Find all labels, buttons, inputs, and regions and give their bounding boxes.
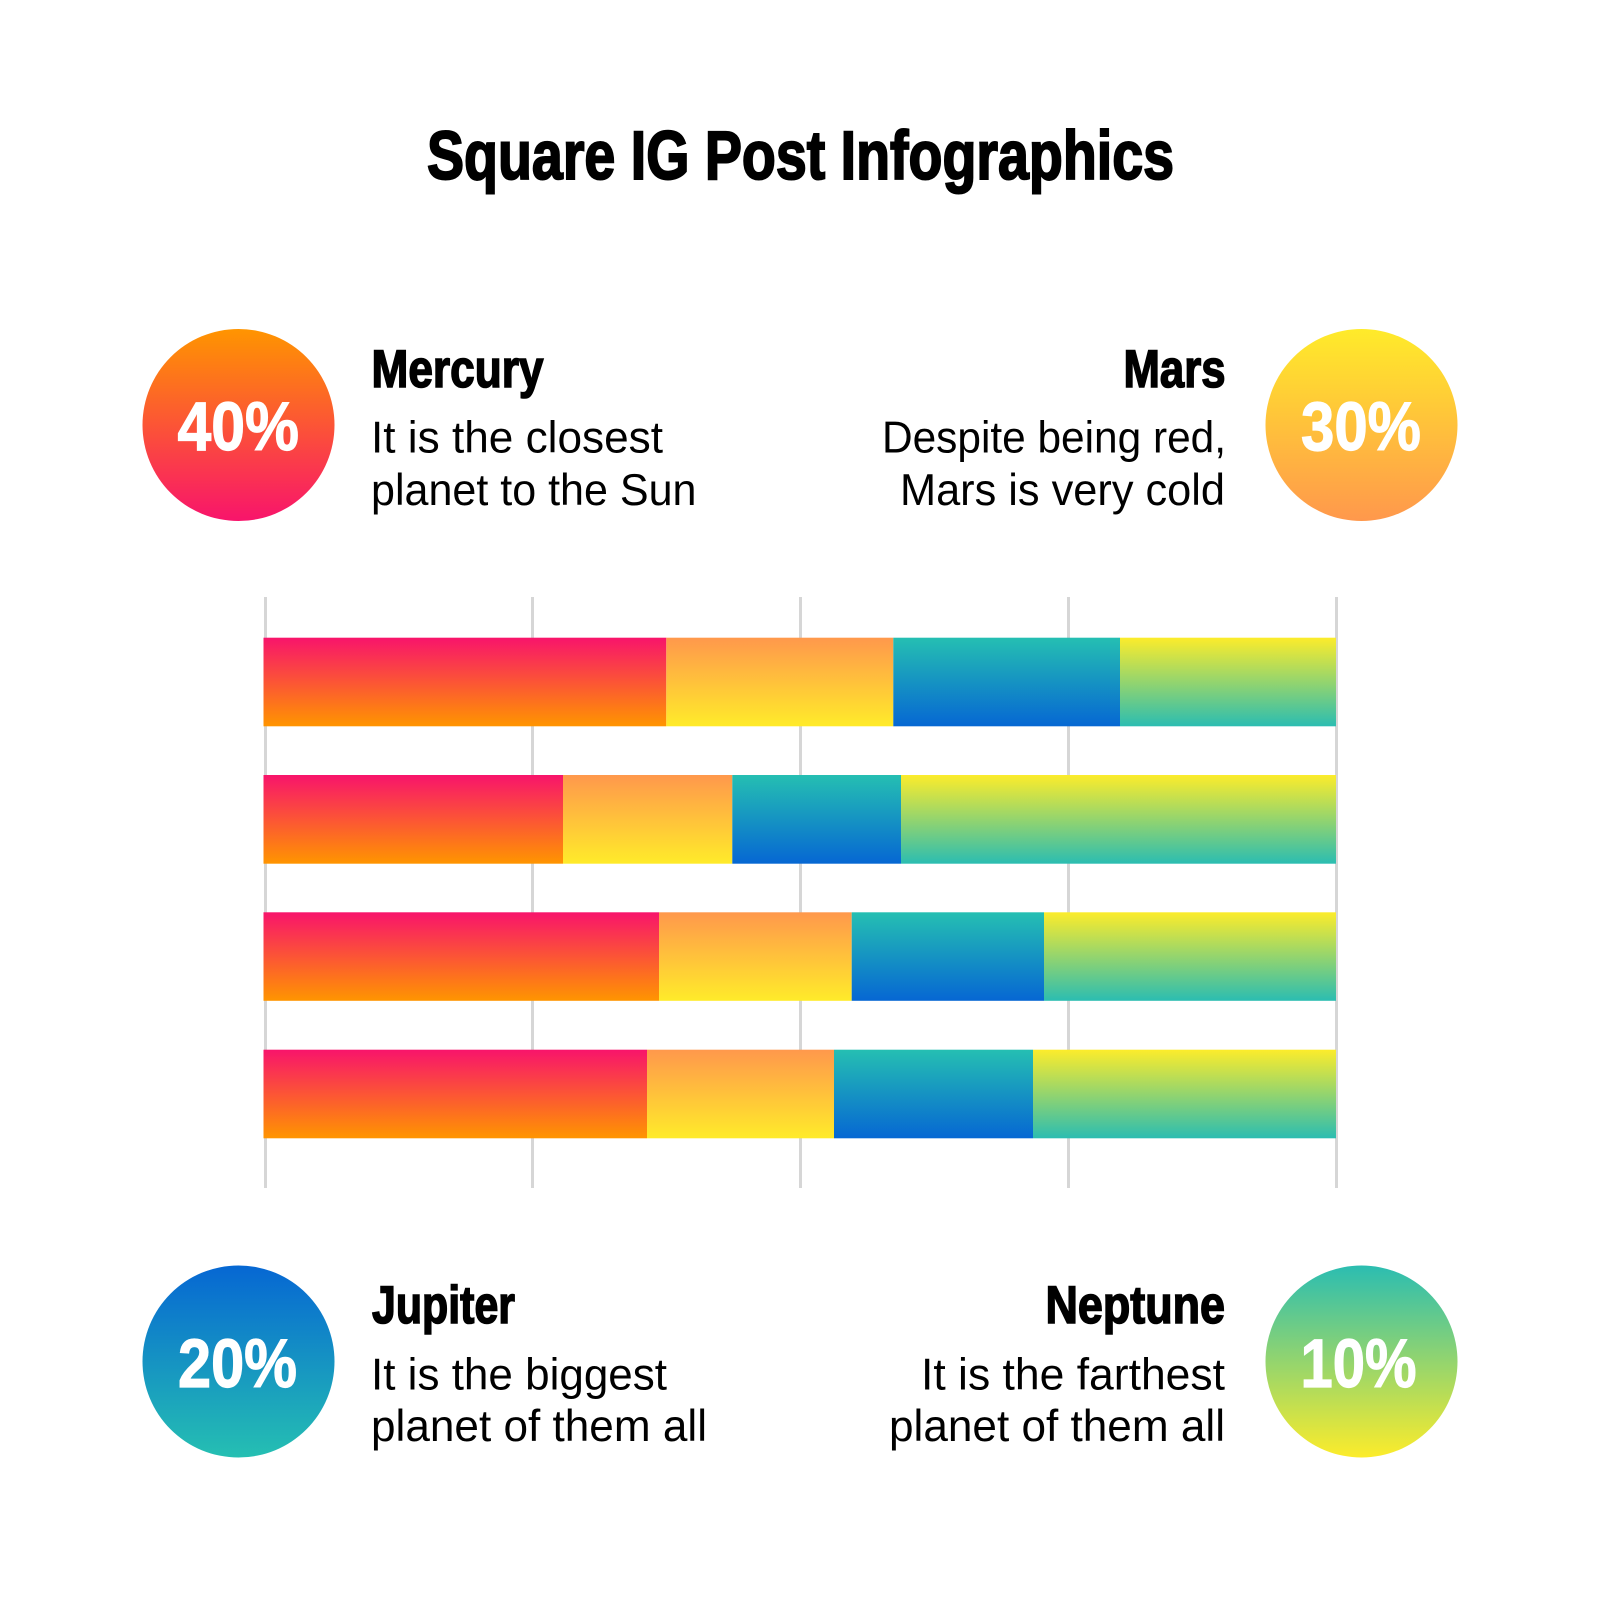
text: Neptune description — [889, 1350, 1226, 1451]
icon: Neptune 10% circle: 10% — [1300, 1325, 1416, 1402]
icon: Mars 30% circle: 30% — [1301, 388, 1421, 465]
text: Mars description: Despite being red, — [882, 414, 1226, 462]
panel: Mercury — [142, 329, 696, 521]
text: Jupiter description: planet of them all — [371, 1402, 707, 1451]
title: Square IG Post Infographics — [427, 117, 1174, 194]
heading: Mercury: Mercury — [372, 340, 544, 399]
bar row 4 — [264, 1050, 1336, 1138]
panel: Mars — [882, 329, 1458, 521]
text: Mars description — [882, 414, 1226, 515]
text: Neptune description: planet of them all — [889, 1402, 1225, 1451]
heading: Jupiter: Jupiter — [372, 1276, 515, 1335]
panel: Jupiter — [142, 1266, 707, 1458]
icon: Jupiter 20% circle: 20% — [178, 1325, 297, 1402]
text: Neptune description: It is the farthest — [921, 1350, 1226, 1400]
heading: Mars: Mars — [1124, 340, 1226, 399]
panel: Neptune — [889, 1266, 1458, 1458]
heading: Neptune: Neptune — [1046, 1276, 1225, 1335]
stacked bar chart — [264, 638, 1336, 1138]
icon: Mars 30% circle — [1266, 329, 1458, 521]
text: Jupiter description: It is the biggest — [371, 1350, 668, 1400]
text: Mercury description — [371, 414, 696, 515]
text: Mercury description: It is the closest — [371, 414, 664, 462]
bar row 1 — [264, 638, 1336, 726]
text: Jupiter description — [371, 1350, 707, 1451]
text: Mars description: Mars is very cold — [900, 466, 1225, 515]
bar row 2 — [264, 775, 1336, 864]
gridlines — [264, 597, 1338, 1188]
icon: Mercury 40% circle: 40% — [178, 388, 299, 465]
icon: Jupiter 20% circle — [142, 1266, 334, 1458]
icon: Neptune 10% circle — [1266, 1266, 1458, 1458]
bar row 3 — [264, 912, 1336, 1001]
icon: Mercury 40% circle — [142, 329, 334, 521]
text: Mercury description: planet to the Sun — [371, 466, 696, 515]
